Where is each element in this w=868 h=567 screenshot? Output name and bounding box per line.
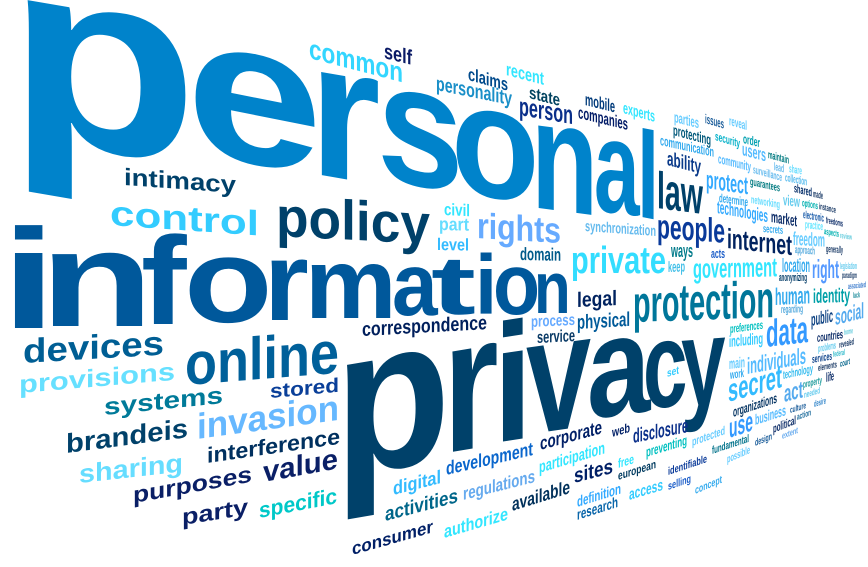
word: synchronization: synchronization <box>585 218 656 240</box>
word: party: party <box>182 494 248 530</box>
word: european: european <box>618 457 656 483</box>
word: selling: selling <box>668 473 691 493</box>
word cloud: users <box>742 138 766 165</box>
word: privacy: i <box>493 287 533 479</box>
word: political: political <box>773 413 796 436</box>
word: access: access <box>629 476 663 504</box>
word: invasion: invasion <box>197 387 339 447</box>
word cloud: practice <box>805 219 823 233</box>
word: personal: l <box>637 106 659 248</box>
word: self: self <box>384 39 413 70</box>
word: communication: communication <box>660 133 714 161</box>
word cloud: property <box>803 375 822 391</box>
word: protected: protected <box>692 423 725 449</box>
word: common: common <box>309 33 403 89</box>
word: brandeis: brandeis <box>66 412 188 459</box>
word: information: f <box>141 211 187 351</box>
word: extent: extent <box>782 425 798 441</box>
word: data: data <box>766 308 808 356</box>
word: personal: n <box>531 65 598 249</box>
word: development: development <box>446 439 533 480</box>
word cloud: problems <box>818 340 836 355</box>
word: information <box>1 199 571 358</box>
word cloud: surveillance <box>753 164 782 184</box>
word: corporate: corporate <box>540 417 602 455</box>
word: act: act <box>784 377 803 408</box>
word cloud: review <box>840 231 852 242</box>
word cloud: share <box>789 163 802 178</box>
word: secrets: secrets <box>763 223 783 237</box>
word: parties: parties <box>674 109 699 132</box>
word: interference: interference <box>207 424 340 468</box>
word: specific: specific <box>259 483 337 523</box>
word: provisions: provisions <box>19 358 175 399</box>
word cloud: maintain <box>768 149 789 167</box>
word: online: online <box>185 319 339 398</box>
word cloud: public <box>811 306 833 330</box>
word: secret: secret <box>728 357 782 409</box>
word: sites: sites <box>574 454 613 488</box>
word cloud: individuals <box>747 343 806 379</box>
word cloud: approach <box>795 244 815 258</box>
word: process: process <box>531 312 575 331</box>
word: information: t <box>431 239 476 332</box>
word: market: market <box>771 208 797 230</box>
word: information: o <box>493 237 540 333</box>
word: part: part <box>439 214 469 235</box>
word cloud: collection <box>785 172 807 188</box>
word: state: state <box>529 82 560 110</box>
word: participation: participation <box>539 438 605 477</box>
word cloud: lead <box>774 161 784 175</box>
word: disclosure: disclosure <box>633 415 688 448</box>
word cloud: aspects <box>824 226 839 239</box>
word: guarantees: guarantees <box>750 176 780 195</box>
word: service: service <box>537 326 575 347</box>
word: possible: possible <box>727 444 750 466</box>
word cloud: community <box>718 151 751 174</box>
word cloud: issues <box>705 111 724 132</box>
word cloud: home <box>844 326 853 337</box>
word cloud: ways <box>671 241 693 261</box>
word cloud: elements <box>818 359 837 373</box>
word: experts: experts <box>623 99 655 126</box>
word: companies: companies <box>578 102 628 134</box>
word: information: i <box>475 239 497 332</box>
word: information: a <box>392 236 439 335</box>
word: sharing: sharing <box>79 448 183 489</box>
word: activities: activities <box>385 485 458 526</box>
word: personal <box>7 0 659 249</box>
word: private: private <box>571 240 666 282</box>
word: physical: physical <box>577 309 630 334</box>
word: set: set <box>667 365 679 380</box>
word: level: level <box>437 235 469 255</box>
word cloud: regarding <box>781 303 803 316</box>
word cloud: electronic <box>803 209 824 225</box>
word: personal: a <box>594 91 641 245</box>
word cloud: freedom <box>793 229 825 252</box>
word cloud: technology <box>783 362 813 382</box>
word cloud: networking <box>751 194 780 211</box>
word: design: design <box>755 432 772 449</box>
word cloud: organizations <box>733 391 777 421</box>
word: information: i <box>1 199 57 358</box>
word cloud: keep <box>668 258 685 276</box>
word: people: people <box>657 208 725 251</box>
word: research: research <box>577 494 618 524</box>
word: protecting: protecting <box>673 122 711 149</box>
word: authorize: authorize <box>444 503 508 542</box>
word: concept: concept <box>695 474 722 497</box>
word cloud: main <box>729 354 745 373</box>
word: legal: legal <box>577 287 617 312</box>
word cloud: instance <box>819 201 836 215</box>
word: information: n <box>40 203 154 355</box>
word: rights: rights <box>477 205 561 251</box>
word: person: person <box>519 91 573 130</box>
word: policy: policy <box>276 185 430 256</box>
word cloud: location <box>782 256 810 277</box>
word: control: control <box>110 194 259 243</box>
word: devices: devices <box>23 325 164 371</box>
word: determine: determine <box>719 191 748 209</box>
word: privacy: y <box>681 292 725 434</box>
word: fundamental: fundamental <box>712 433 749 457</box>
word: needed: needed <box>804 385 820 400</box>
word cloud: services <box>812 351 832 366</box>
word cloud: preferences <box>730 318 763 336</box>
word: personal: r <box>309 0 381 227</box>
word: action: action <box>797 407 811 422</box>
word: claims: claims <box>468 63 508 95</box>
word: government: government <box>693 252 777 284</box>
word: ability: ability <box>667 148 701 179</box>
word: regulations: regulations <box>463 465 535 504</box>
word cloud: technologies <box>717 197 768 226</box>
word: systems: systems <box>104 382 223 421</box>
word: privacy: p <box>334 269 451 523</box>
word: privacy: v <box>526 279 591 470</box>
word: personality: personality <box>436 73 513 110</box>
word cloud: desire <box>814 396 826 409</box>
word: identifiable: identifiable <box>668 453 707 478</box>
word: security: security <box>715 129 740 150</box>
word: digital: digital <box>393 467 441 500</box>
word: available: available <box>512 476 570 516</box>
word: privacy: r <box>443 272 499 494</box>
word: free: free <box>618 451 634 471</box>
word cloud: business <box>755 402 786 429</box>
word: information: n <box>534 249 571 329</box>
word cloud: options <box>802 198 818 212</box>
word: definition: definition <box>577 481 621 511</box>
word: internet: internet <box>727 223 792 261</box>
word: work: work <box>730 366 744 382</box>
word: information: o <box>184 215 273 348</box>
word cloud: including <box>729 330 763 351</box>
word: purposes: purposes <box>133 461 252 508</box>
word: personal: o <box>451 45 540 239</box>
word: privacy: a <box>587 283 651 450</box>
word: law: law <box>657 162 703 226</box>
word cloud: anonymizing <box>779 272 807 284</box>
word cloud: shared <box>794 181 812 199</box>
word: view: view <box>783 192 800 211</box>
word cloud: human <box>775 282 810 311</box>
word cloud: reveal <box>729 113 747 133</box>
word: intimacy: intimacy <box>124 164 237 199</box>
word: domain: domain <box>520 244 561 265</box>
word: privacy: c <box>643 294 687 435</box>
word: consumer: consumer <box>352 516 433 559</box>
word: value: value <box>263 444 338 489</box>
word: correspondence: correspondence <box>362 312 487 341</box>
word: preventing: preventing <box>646 433 687 461</box>
word: recent: recent <box>506 58 544 89</box>
word: web: web <box>611 420 630 440</box>
word: stored: stored <box>270 375 339 403</box>
word: personal: s <box>377 22 464 232</box>
word: order: order <box>743 131 760 150</box>
word: civil: civil <box>444 200 470 220</box>
word cloud: protect <box>706 166 748 200</box>
word: culture: culture <box>790 400 806 415</box>
word: mobile: mobile <box>585 89 615 116</box>
word cloud: use <box>729 406 753 445</box>
word: information: m <box>305 227 397 340</box>
word: information: r <box>264 219 309 345</box>
word cloud: made <box>813 189 823 202</box>
word: privacy <box>334 269 725 523</box>
word: acts: acts <box>711 246 725 261</box>
word cloud: federal <box>833 348 845 359</box>
word cloud: court <box>840 356 850 369</box>
word cloud: life <box>826 368 834 385</box>
word cloud: freedoms <box>826 215 843 229</box>
